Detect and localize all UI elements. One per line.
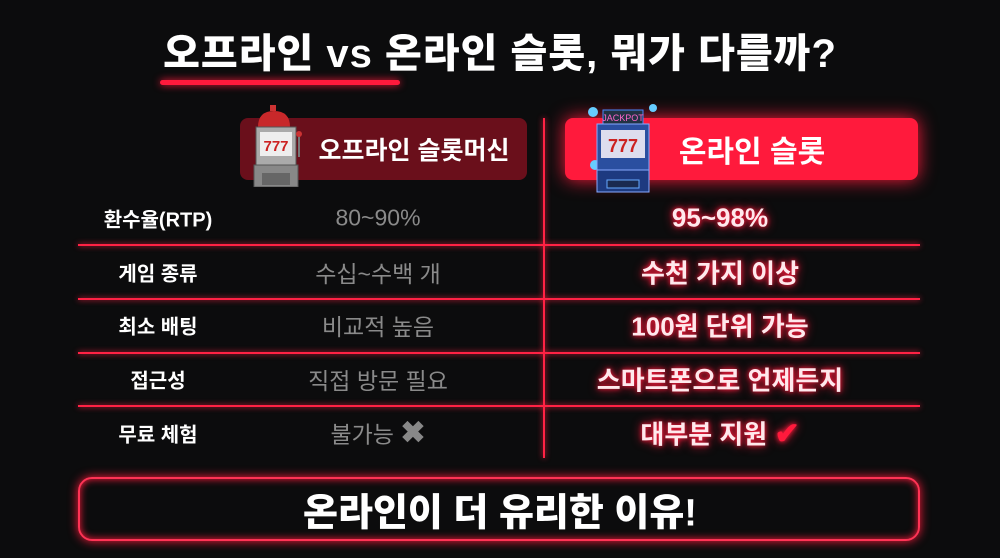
row: games: 수천 가지 이상	[641, 258, 799, 288]
row: access: 스마트폰으로 언제든지	[597, 366, 843, 396]
callout: 온라인이 더 유리한 이유!	[303, 492, 697, 534]
icon: offline slot machine: 777	[263, 138, 289, 155]
icon: offline slot machine	[254, 105, 302, 187]
header: online	[565, 118, 918, 180]
row: min bet	[118, 307, 814, 346]
divider	[543, 118, 545, 458]
title underline	[160, 80, 400, 85]
icon: online slot machine	[588, 104, 657, 192]
row: access: 직접 방문 필요	[308, 368, 448, 394]
row: min bet: 최소 배팅	[118, 316, 198, 338]
row: min bet: 100원 단위 가능	[631, 312, 809, 342]
row: RTP	[104, 201, 774, 234]
row: RTP: 95~98%	[672, 202, 768, 232]
row: games: 게임 종류	[118, 264, 198, 286]
title: 오프라인 vs 온라인 슬롯, 뭐가 다를까?	[163, 32, 837, 76]
row: games: 수십~수백 개	[315, 261, 441, 287]
row: access	[130, 360, 848, 400]
row: RTP: 80~90%	[335, 204, 421, 230]
header: offline	[240, 118, 527, 180]
icon: online slot machine: JACKPOT	[602, 113, 644, 123]
header: offline: 오프라인 슬롯머신	[319, 137, 509, 165]
icon: online slot machine: 777	[608, 136, 638, 156]
header: online: 온라인 슬롯	[679, 136, 825, 169]
row: min bet: 비교적 높음	[322, 314, 434, 340]
row: games	[118, 254, 804, 292]
row: free trial: 불가능 ✖	[330, 416, 426, 450]
row: free trial	[118, 414, 802, 454]
row: free trial: 무료 체험	[118, 424, 198, 446]
callout	[78, 477, 920, 541]
row: free trial: 대부분 지원 ✔	[640, 418, 800, 450]
row: RTP: 환수율(RTP)	[104, 210, 212, 232]
row: access: 접근성	[130, 370, 186, 392]
